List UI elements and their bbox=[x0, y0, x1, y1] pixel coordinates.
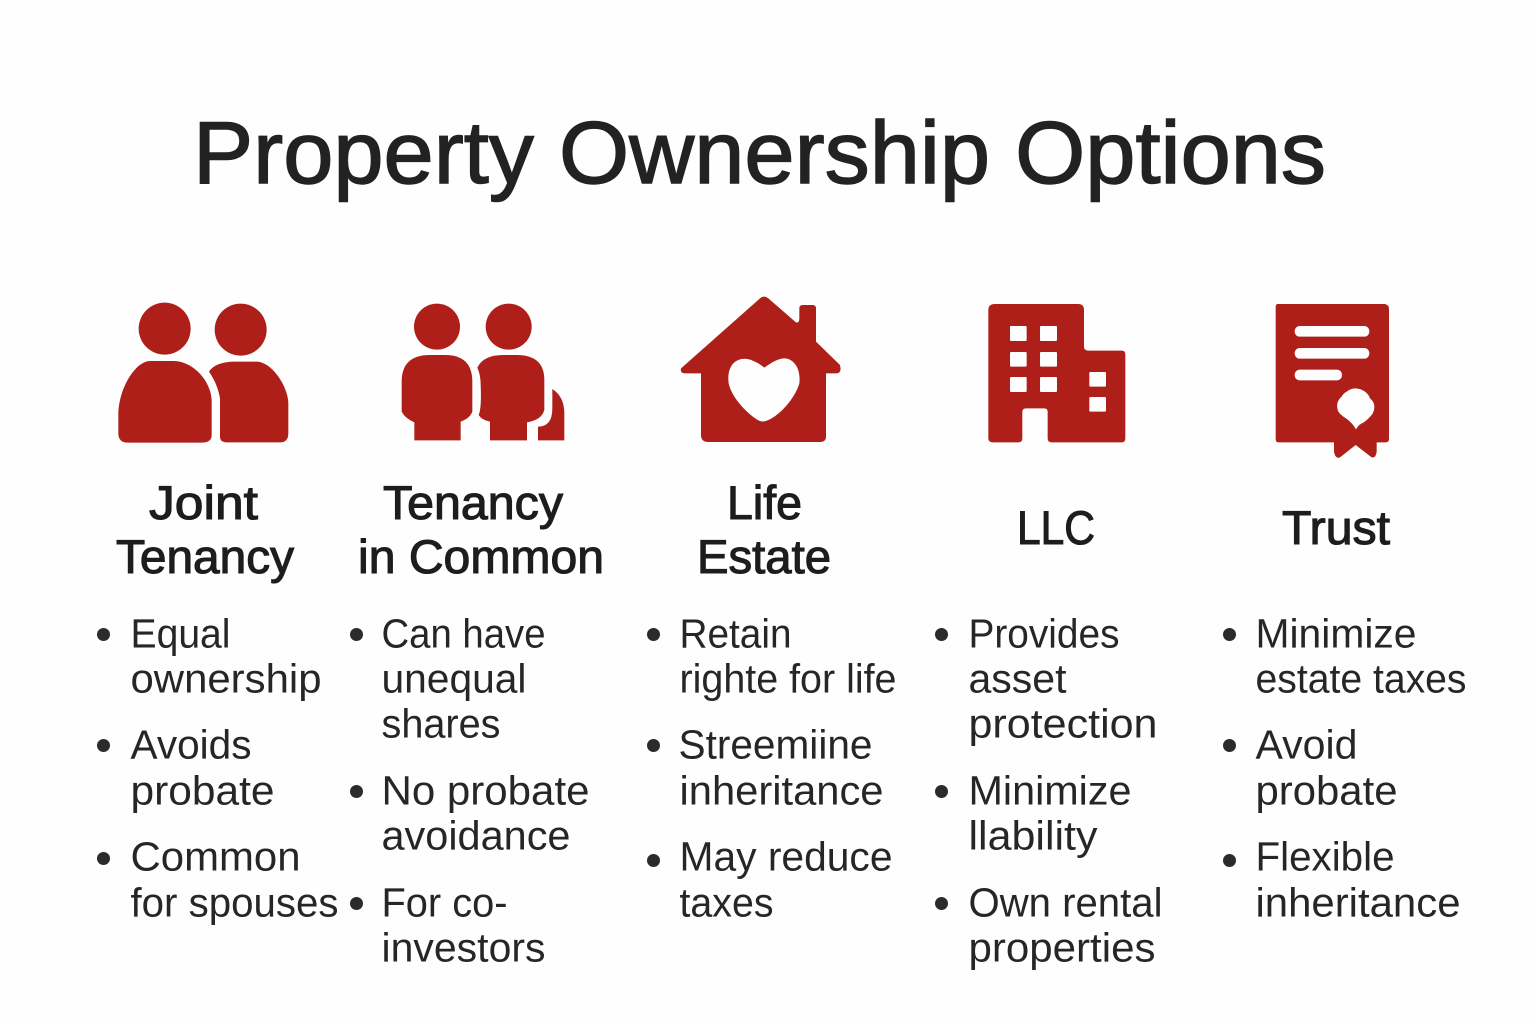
bullet list: llc: llability bbox=[968, 812, 1098, 858]
heading: tenancy in common bbox=[358, 476, 604, 583]
bullet list: tenancy in common: unequal bbox=[382, 656, 526, 702]
bullet list: tenancy in common: For co- bbox=[382, 880, 508, 926]
bullet list: tenancy in common: avoidance bbox=[382, 812, 570, 858]
bullet list: llc: asset bbox=[968, 656, 1067, 702]
bullet list: life estate bbox=[647, 610, 896, 926]
bullet list: tenancy in common bbox=[350, 610, 590, 970]
heading: llc: LLC bbox=[1017, 501, 1095, 554]
heading: tenancy in common: Tenancy bbox=[383, 476, 564, 529]
bullet list: joint tenancy bbox=[97, 610, 338, 926]
bullet list: llc: Own rental bbox=[968, 880, 1162, 926]
bullet list: trust: estate taxes bbox=[1256, 656, 1466, 702]
bullet list: trust bbox=[1223, 610, 1466, 926]
bullet list: trust: Flexible bbox=[1256, 834, 1394, 880]
heading: joint tenancy: Tenancy bbox=[116, 530, 295, 583]
panel: llc bbox=[935, 304, 1162, 970]
bullet list: llc: protection bbox=[968, 700, 1158, 746]
heading: tenancy in common: in Common bbox=[358, 530, 604, 583]
icon: house with heart bbox=[681, 297, 841, 442]
bullet list: joint tenancy: Equal bbox=[130, 610, 230, 656]
panel: tenancy in common bbox=[350, 304, 604, 970]
bullet list: life estate: May reduce bbox=[680, 834, 892, 880]
title: Property Ownership Options bbox=[193, 103, 1326, 202]
icon: two people bbox=[118, 303, 288, 443]
bullet list: joint tenancy: for spouses bbox=[130, 880, 338, 926]
heading: joint tenancy bbox=[116, 476, 295, 583]
bullet list: llc: Minimize bbox=[968, 768, 1132, 814]
bullet list: trust: Minimize bbox=[1256, 610, 1416, 656]
bullet list: llc bbox=[935, 610, 1162, 970]
heading: life estate: Life bbox=[727, 476, 802, 529]
bullet list: tenancy in common: No probate bbox=[382, 768, 590, 814]
bullet list: trust: Avoid bbox=[1256, 722, 1358, 768]
bullet list: joint tenancy: Common bbox=[130, 834, 300, 880]
bullet list: joint tenancy: probate bbox=[130, 768, 274, 814]
heading: life estate bbox=[697, 476, 831, 583]
bullet list: llc: Provides bbox=[968, 610, 1120, 656]
bullet list: joint tenancy: ownership bbox=[130, 656, 322, 702]
heading: life estate: Estate bbox=[697, 530, 831, 583]
bullet list: tenancy in common: investors bbox=[382, 924, 546, 970]
bullet list: life estate: Retain bbox=[680, 610, 792, 656]
bullet list: tenancy in common: Can have bbox=[382, 610, 546, 656]
heading: trust: Trust bbox=[1282, 501, 1390, 554]
panel: life estate bbox=[647, 297, 896, 926]
icon: document with seal bbox=[1276, 304, 1389, 458]
bullet list: life estate: Streemiine bbox=[678, 722, 872, 768]
icon: two people with partial third bbox=[402, 304, 564, 440]
panel: trust bbox=[1223, 304, 1466, 926]
bullet list: joint tenancy: Avoids bbox=[130, 722, 252, 768]
icon: office building bbox=[988, 304, 1125, 442]
bullet list: trust: probate bbox=[1256, 768, 1398, 814]
bullet list: tenancy in common: shares bbox=[382, 700, 500, 746]
bullet list: trust: inheritance bbox=[1256, 880, 1460, 926]
panel: joint tenancy bbox=[97, 303, 338, 926]
bullet list: llc: properties bbox=[968, 924, 1156, 970]
heading: joint tenancy: Joint bbox=[149, 476, 258, 529]
bullet list: life estate: inheritance bbox=[680, 768, 884, 814]
bullet list: life estate: taxes bbox=[680, 880, 774, 926]
bullet list: life estate: righte for life bbox=[680, 656, 896, 702]
